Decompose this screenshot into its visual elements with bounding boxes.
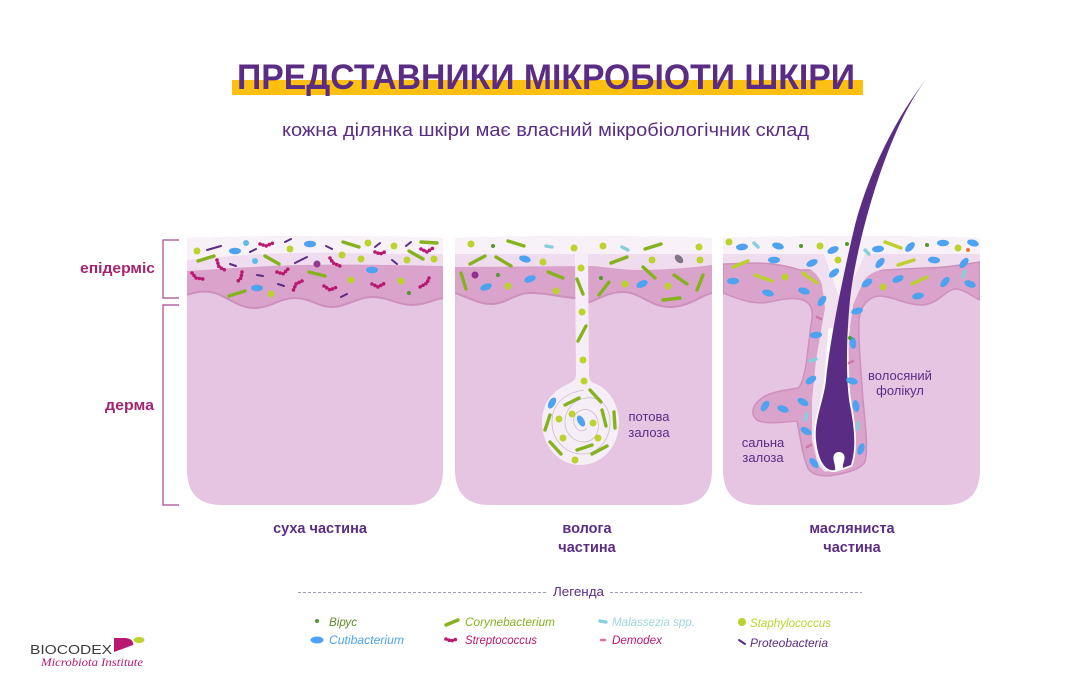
microbes: moist skin [461, 240, 704, 464]
sweat gland spiral [552, 390, 610, 454]
logo [30, 637, 144, 669]
label: hair follicle: фолікул [876, 383, 924, 398]
legend item: staphylococcus: Staphylococcus [750, 616, 831, 630]
follicle channel [810, 269, 884, 472]
caption: moist: волога [562, 521, 613, 537]
label: sweat gland [628, 409, 670, 440]
legend [298, 584, 862, 650]
caption: oily: масляниста [809, 521, 896, 537]
label: hair follicle [868, 368, 932, 398]
caption: moist [558, 521, 617, 556]
microbes: oily skin [726, 238, 980, 470]
legend item: malassezia: Malassezia spp. [612, 615, 695, 629]
legend item: streptococcus: Streptococcus [465, 633, 537, 647]
label: sweat gland: потова [628, 409, 670, 424]
caption: moist: частина [558, 540, 617, 556]
caption: oily: частина [823, 540, 882, 556]
legend item: virus [315, 615, 357, 629]
legend item: corynebacterium: Corynebacterium [465, 615, 555, 629]
subtitle: кожна ділянка шкіри має власний мікробіологічник склад [282, 119, 809, 140]
label: sweat gland: залоза [628, 425, 670, 440]
legend item: demodex: Demodex [612, 633, 663, 647]
caption: oily [809, 521, 896, 556]
logo: BIOCODEX [30, 642, 112, 657]
panel: dry skin [187, 234, 443, 506]
label: sebaceous gland: сальна [742, 435, 785, 450]
label: dermis: дерма [105, 398, 155, 414]
dermis bracket [163, 305, 179, 505]
title: ПРЕДСТАВНИКИ МІКРОБІОТИ ШКІРИ [237, 58, 855, 97]
title highlight bar [232, 80, 863, 95]
hair [816, 77, 928, 470]
label: sebaceous gland [742, 435, 785, 465]
label: hair follicle: волосяний [868, 368, 932, 383]
label: sebaceous gland: залоза [742, 450, 784, 465]
legend heading: Легенда [553, 584, 605, 599]
panel: moist skin [455, 234, 712, 506]
legend item: proteobacteria: Proteobacteria [750, 636, 828, 650]
sweat duct [542, 252, 619, 465]
label: epidermis: епідерміс [80, 261, 155, 277]
caption: dry: суха частина [273, 521, 368, 537]
epidermis bracket [163, 240, 179, 298]
legend item: cutibacterium: Cutibacterium [329, 633, 404, 647]
microbes: dry skin [192, 239, 438, 298]
legend item: virus: Вірус [329, 615, 357, 629]
panel: oily skin [723, 77, 980, 506]
logo: Microbiota Institute [40, 655, 144, 669]
